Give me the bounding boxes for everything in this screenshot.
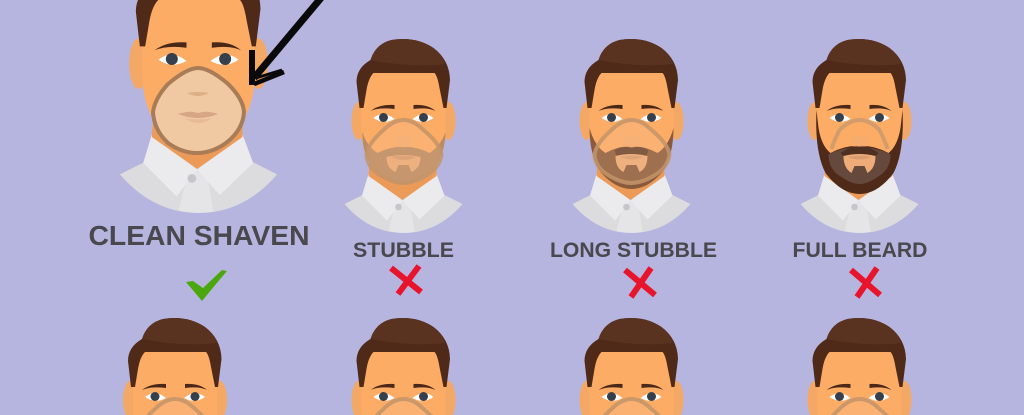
mask on clean shaven face	[153, 68, 244, 153]
label: stubble: STUBBLE	[353, 239, 454, 262]
red cross	[391, 266, 421, 294]
row 2 figure 2	[352, 318, 456, 415]
full beard	[816, 110, 903, 194]
arrow pointing at mask edge	[252, 0, 321, 85]
nose and lips	[178, 92, 218, 123]
figure: clean shaven	[120, 0, 277, 213]
label: long stubble: LONG STUBBLE	[550, 239, 717, 262]
check mark	[186, 270, 227, 301]
long stubble beard	[590, 128, 674, 189]
figure: full beard	[800, 39, 918, 233]
label: full beard: FULL BEARD	[792, 239, 928, 262]
label: clean shaven: CLEAN SHAVEN	[88, 220, 310, 251]
red cross	[851, 268, 880, 297]
figure: stubble	[344, 39, 462, 233]
row 2 figure 3	[580, 318, 684, 415]
red cross	[625, 268, 655, 297]
row 2 figure 4	[808, 318, 912, 415]
row 2 figure 1	[123, 318, 227, 415]
figure: long stubble	[572, 39, 690, 233]
stubble beard	[362, 132, 446, 184]
